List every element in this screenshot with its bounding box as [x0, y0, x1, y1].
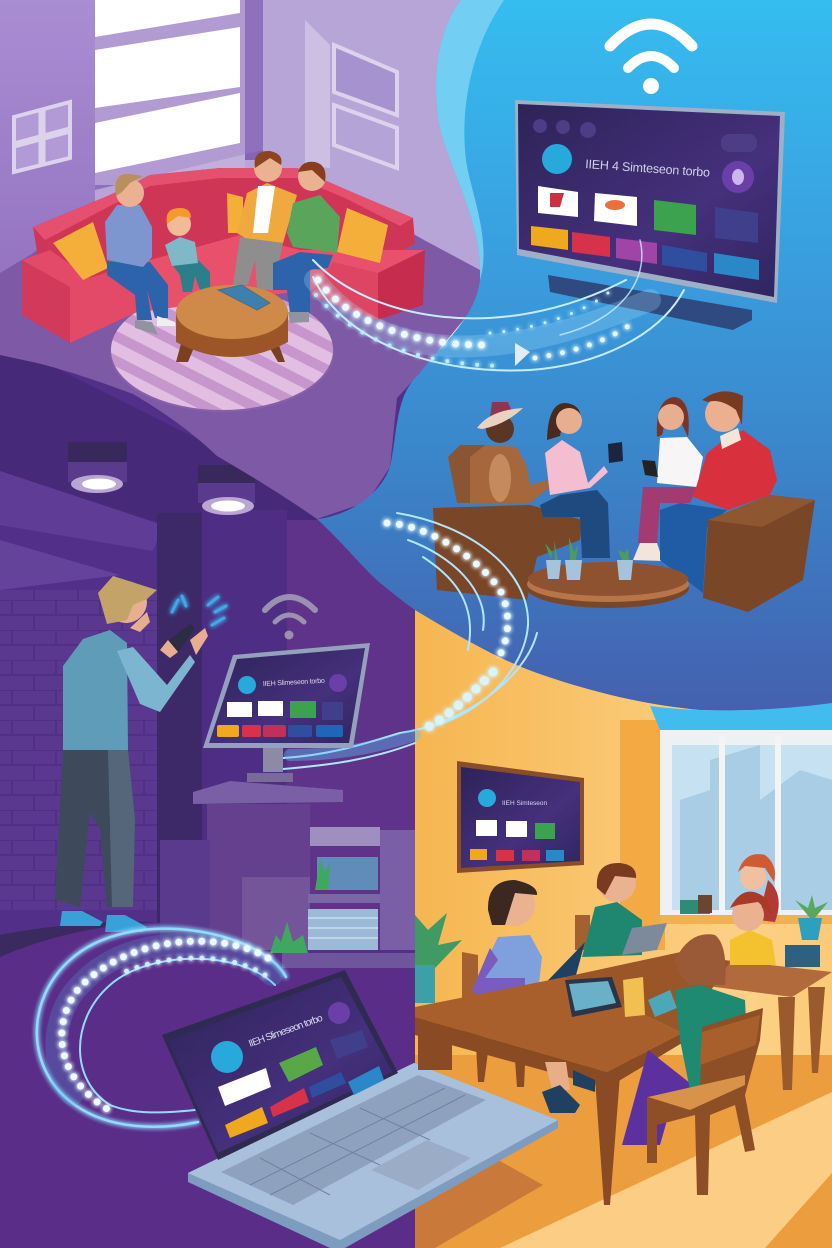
panel: yellow classroom: [415, 600, 832, 1248]
data stream: tablet to laptop: [37, 929, 286, 1127]
phone: [160, 624, 208, 658]
woman in white: [633, 397, 703, 561]
boy in hoodie: [462, 880, 585, 1035]
sill items: [680, 895, 828, 967]
coffee table: [176, 285, 288, 362]
man in red: [660, 391, 777, 593]
plant in classroom: [415, 913, 462, 1003]
man in green sweater: [273, 162, 340, 323]
laptop tiles: [218, 1030, 384, 1138]
light cyan edge: [436, 0, 504, 280]
tablet tiles: [217, 701, 343, 737]
floor: [0, 170, 480, 519]
icon: wifi small: [265, 597, 315, 640]
wall tv: [457, 761, 584, 873]
man with phone: [55, 576, 226, 932]
main table: [415, 950, 730, 1205]
child: [165, 208, 210, 292]
back table: [700, 960, 832, 1090]
desk items: [565, 977, 677, 1017]
keyboard: [221, 1075, 486, 1205]
laptop: IIEH Slimeseon torbo: [247, 1013, 325, 1050]
red sofa: [22, 168, 425, 343]
floor: [0, 923, 415, 1248]
screen: [162, 970, 398, 1160]
boy's chair legs and shins: [476, 1045, 595, 1113]
child in yellow: [730, 892, 776, 965]
man in yellow jacket: [233, 151, 297, 290]
tablet on stand: IIEH Slimeseon torbo: [263, 678, 325, 688]
boy in green with laptop: [575, 863, 667, 957]
shelf: [160, 781, 415, 968]
low table: [527, 562, 689, 608]
family on sofa: [105, 151, 340, 335]
potted plants: [545, 537, 633, 580]
armchair: [433, 445, 582, 600]
tv: [515, 100, 785, 330]
side ottoman: [703, 495, 815, 612]
wall tv tiles: [470, 820, 564, 861]
window: [660, 728, 832, 924]
plug icon: [515, 343, 530, 366]
girl from behind: [622, 934, 748, 1145]
sweater: [63, 630, 128, 750]
data stream: lounge to tablet: [283, 513, 537, 769]
wall tv: IIEH Simteseon: [502, 800, 548, 807]
rug: [110, 290, 334, 412]
wall frames: [14, 45, 397, 172]
ceiling lamp right: [198, 465, 255, 515]
icon: wifi large: [610, 24, 692, 94]
panel: dark purple loft: [0, 340, 420, 1248]
tablet on table: [218, 285, 270, 310]
book stacks: [308, 827, 380, 950]
tv app tiles: [531, 186, 759, 280]
tablet on stand: [203, 643, 370, 782]
cyan band under wave: [650, 703, 832, 730]
trousers: [55, 750, 135, 907]
person in hat: [470, 402, 550, 503]
ceiling lamp left: [68, 442, 127, 493]
panel: blue wave background: [317, 0, 832, 711]
floor: [415, 1055, 832, 1248]
shoes: [60, 911, 147, 932]
father in blue: [105, 174, 175, 335]
students: [462, 854, 779, 1035]
front chair: [647, 1008, 763, 1195]
data stream: sofa to tv: [313, 240, 684, 371]
sparkles: [172, 596, 226, 625]
tv title: IIEH 4 Simteseon torbo: [585, 157, 711, 180]
woman in pink: [540, 403, 623, 558]
head: [98, 576, 157, 632]
trackpad: [371, 1140, 471, 1190]
window: [95, 0, 245, 185]
laptop: [162, 970, 558, 1248]
girl with red ponytail: [738, 854, 779, 922]
lounge group: [433, 391, 815, 612]
panel: top-left living room: [0, 0, 510, 519]
